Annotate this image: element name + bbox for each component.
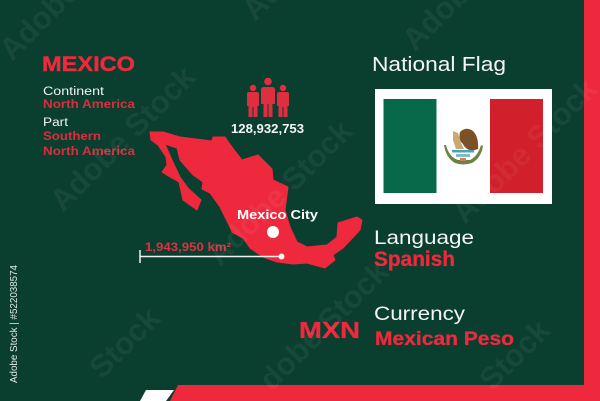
- map of Mexico: [150, 132, 362, 268]
- info block: part: Southern: [43, 131, 101, 143]
- watermark: dobe Stock: [252, 254, 396, 397]
- watermark: Stock: [82, 300, 167, 385]
- capital label: Mexico City: [237, 208, 318, 222]
- national flag: [375, 89, 552, 204]
- watermark: Stock: [472, 312, 557, 397]
- currency: [374, 303, 514, 350]
- watermark: Adobe Stock: [43, 59, 202, 218]
- info block: part: Part: [43, 117, 69, 129]
- language: Language: [374, 227, 474, 249]
- info block: continent: [43, 86, 136, 111]
- watermark: Adobe Stock: [445, 71, 600, 230]
- area measure: 1,943,950 km²: [145, 240, 231, 254]
- watermark: Adobe Stock: [200, 113, 359, 272]
- language: [374, 227, 474, 271]
- icon: people: [247, 78, 289, 117]
- info block: part: North America: [43, 146, 136, 158]
- info block: continent: North America: [43, 99, 136, 111]
- info block: continent: Continent: [43, 86, 105, 98]
- heading: national flag: National Flag: [372, 54, 506, 76]
- info block: part: [43, 117, 136, 158]
- currency: Mexican Peso: [375, 328, 514, 350]
- population: 128,932,753: [231, 122, 304, 136]
- currency code: MXN: [299, 317, 360, 343]
- area measure: [140, 240, 284, 263]
- icon: coat of arms: [444, 129, 483, 164]
- currency: Currency: [374, 303, 465, 325]
- title: MEXICO: [42, 53, 135, 76]
- stock id: Adobe Stock | #522038574: [8, 265, 20, 383]
- language: Spanish: [374, 248, 455, 271]
- capital marker: [267, 226, 279, 238]
- side frame: [140, 0, 600, 401]
